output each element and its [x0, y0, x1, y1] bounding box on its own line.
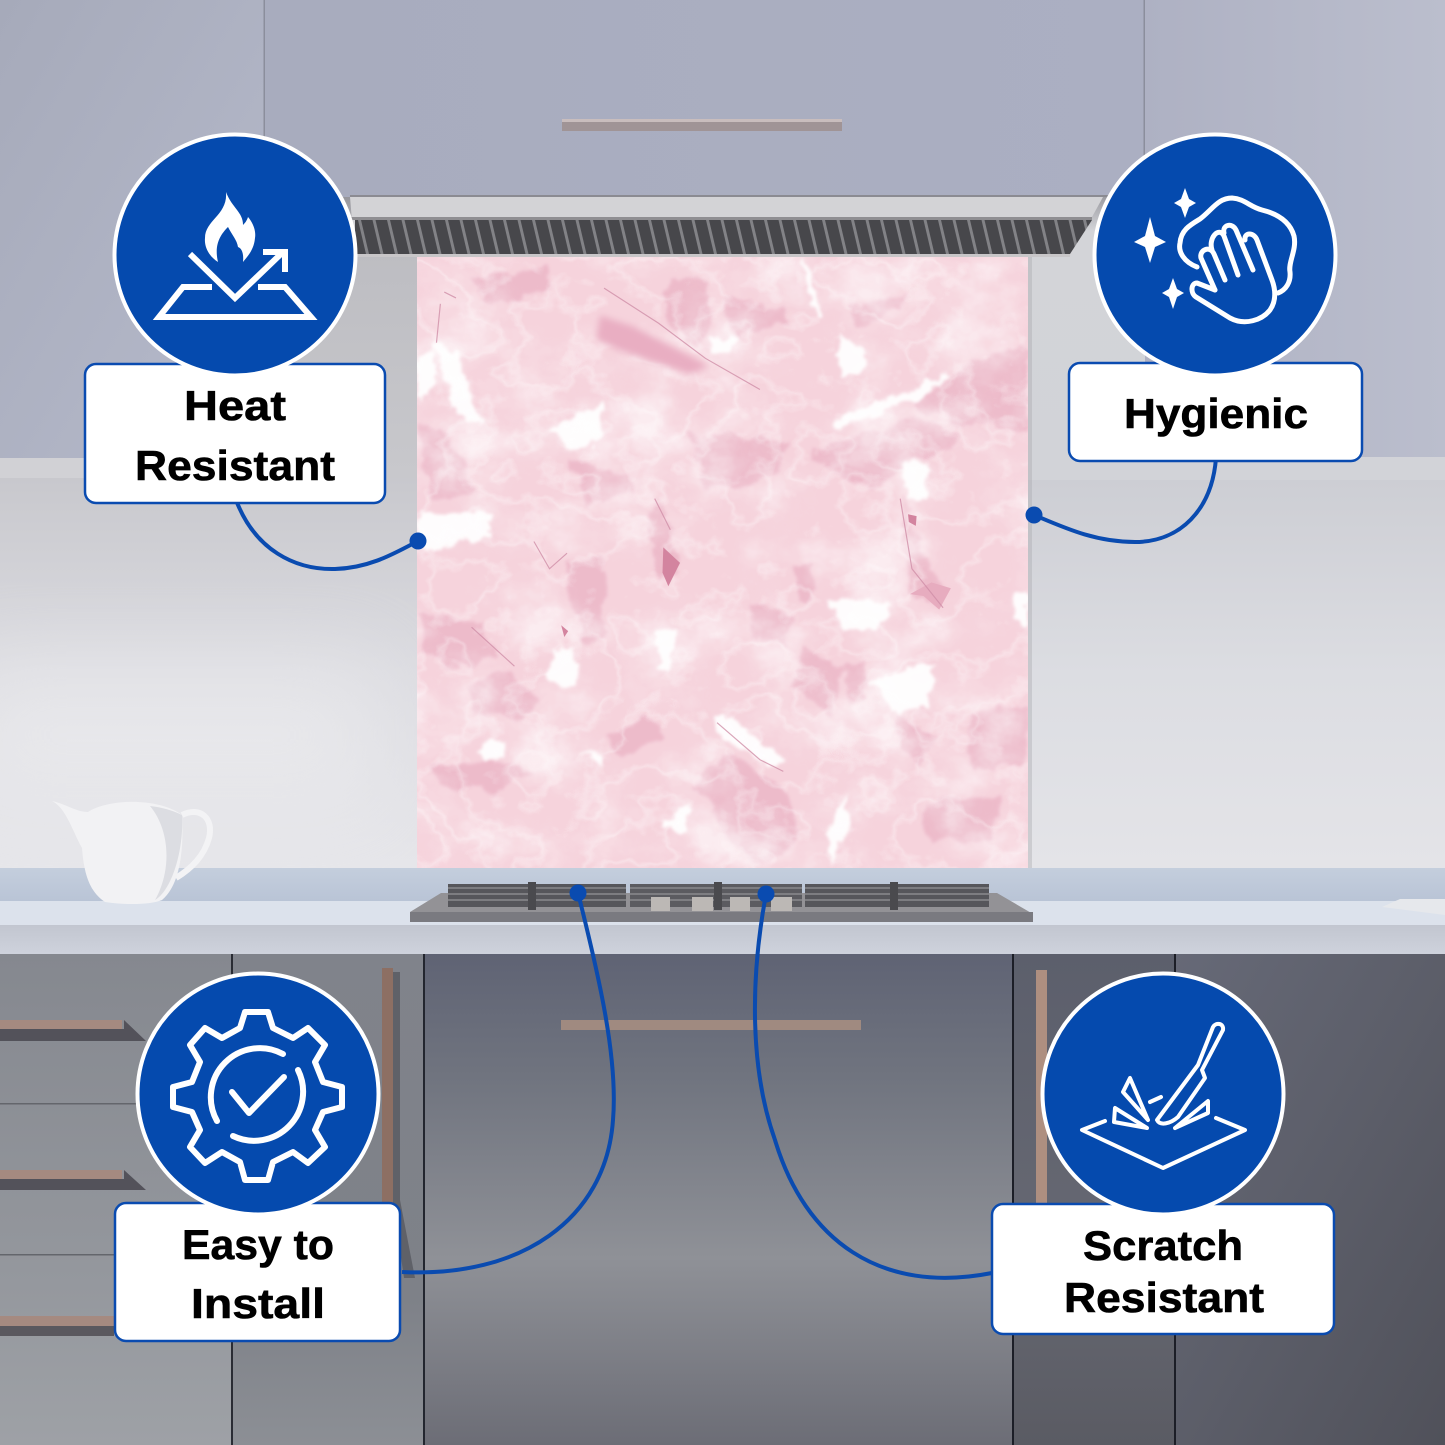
label: scratch resistant: Resistant	[1064, 1274, 1264, 1321]
label: scratch resistant	[992, 1204, 1334, 1334]
label: easy to install	[115, 1203, 400, 1341]
countertop	[0, 868, 1445, 954]
label: scratch resistant: Scratch	[1083, 1222, 1243, 1269]
icon: hand wiping with sparkles	[1134, 188, 1295, 322]
dark magenta veins	[436, 288, 951, 771]
label: hygienic: Hygienic	[1124, 390, 1308, 437]
label: heat resistant: Resistant	[135, 442, 335, 489]
label: heat resistant: Heat	[184, 382, 286, 429]
connector: hygienic	[1026, 458, 1216, 542]
cooktop	[410, 882, 1033, 922]
fine white veins	[417, 257, 1028, 868]
icon: gear with check	[173, 1012, 342, 1180]
label: easy to install: Easy to	[182, 1221, 334, 1268]
icon: knife scratching surface	[1082, 1024, 1245, 1168]
badge: heat resistant	[114, 134, 356, 376]
white marble patches	[417, 257, 1028, 868]
pink marble panel	[417, 257, 1028, 868]
cabinet handles	[0, 119, 1047, 1336]
darker pink patches	[417, 265, 1028, 865]
lower cabinets	[0, 954, 1445, 1445]
range hood	[350, 195, 1145, 257]
label: easy to install: Install	[191, 1280, 325, 1327]
teapot	[52, 801, 210, 904]
connector: heat resistant	[236, 500, 426, 569]
label: hygienic	[1069, 363, 1362, 461]
label: heat resistant	[85, 364, 385, 503]
connector: easy to install	[402, 884, 614, 1272]
badge: easy to install	[138, 974, 378, 1214]
badge: scratch resistant	[1042, 974, 1284, 1214]
connector: scratch resistant	[755, 886, 992, 1278]
icon: flame over surface	[159, 192, 311, 317]
badge: hygienic	[1094, 134, 1336, 376]
